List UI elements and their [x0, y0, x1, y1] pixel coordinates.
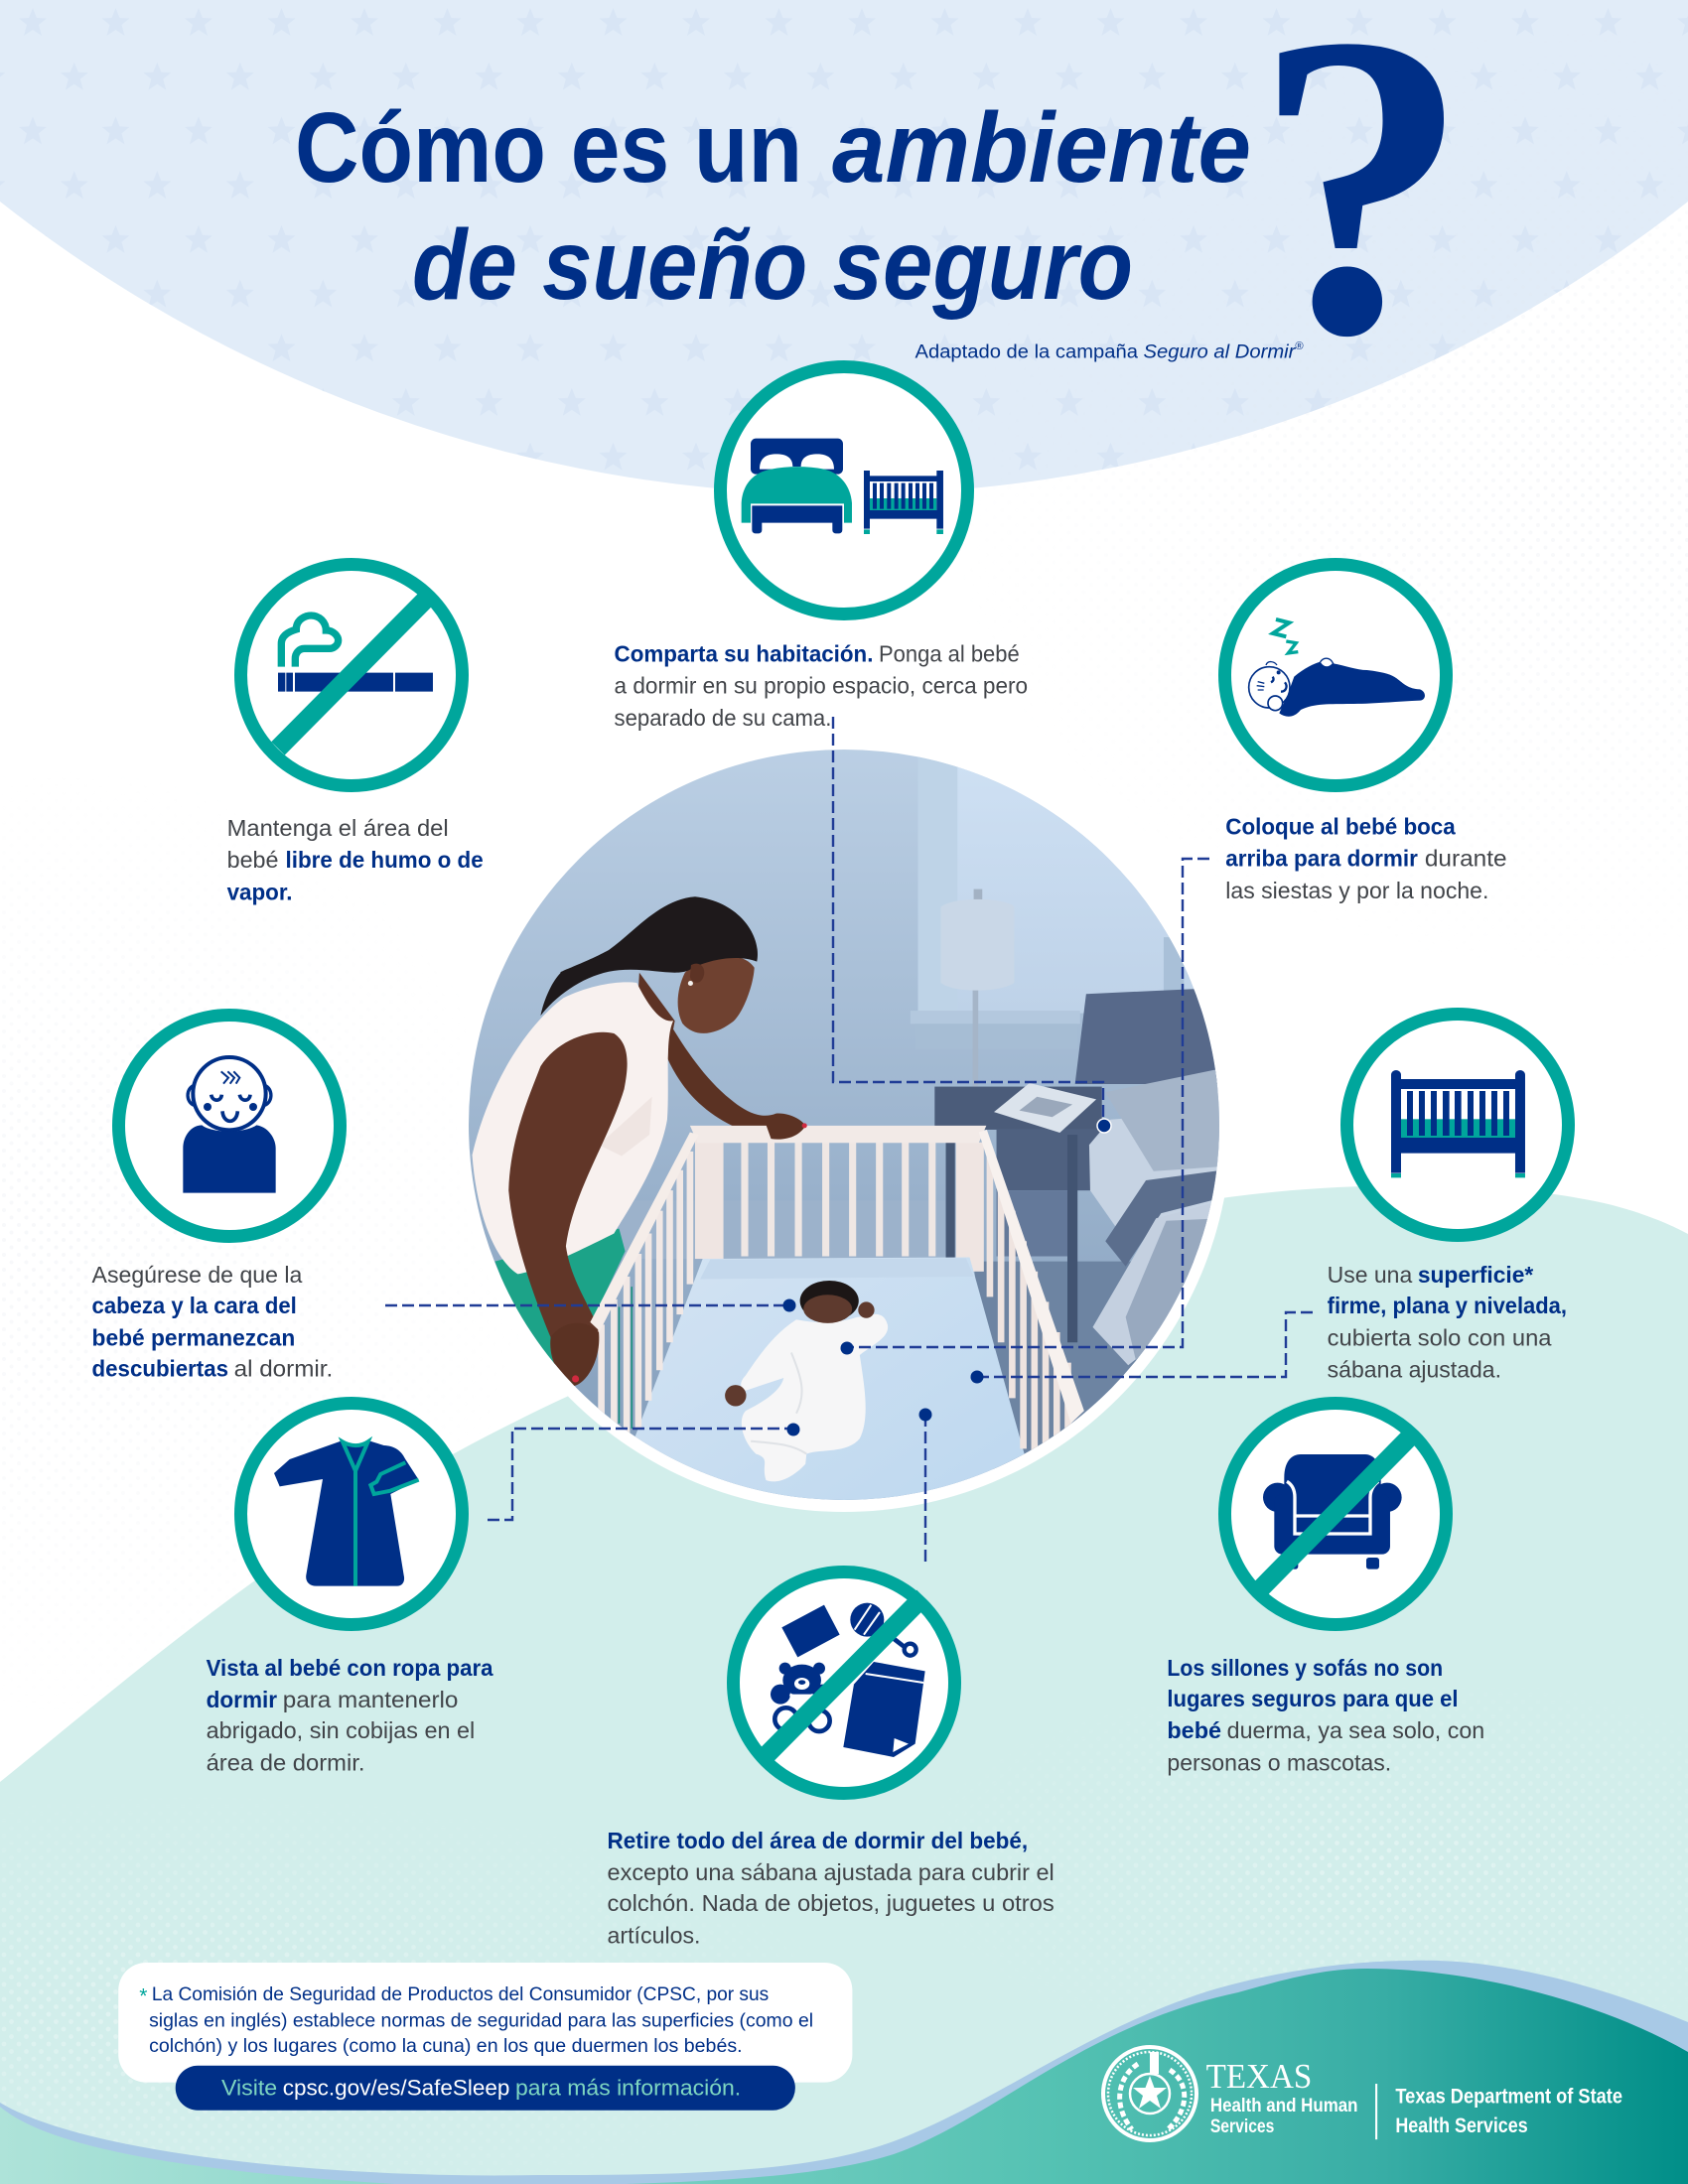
- panel: back to sleep: [1225, 564, 1507, 903]
- text: uncovered head: bebé permanezcan: [92, 1324, 295, 1350]
- baby: [725, 1281, 888, 1481]
- text: firm surface: cubierta solo con una: [1328, 1324, 1552, 1350]
- text: firm surface: sábana ajustada.: [1328, 1357, 1501, 1383]
- icon: no smoking: [240, 564, 463, 786]
- call to action pill: para más información.: [515, 2075, 741, 2100]
- text: uncovered head: cabeza y la cara del: [92, 1293, 297, 1318]
- logo: agency names: TEXAS: [1206, 2057, 1312, 2096]
- text: firm surface: firme, plana y nivelada,: [1328, 1293, 1567, 1318]
- logo: agency names: Health and Human: [1210, 2095, 1358, 2116]
- text: share room: separado de su cama.: [615, 705, 831, 731]
- text: clear items: excepto una sábana ajustada para cubrir el: [608, 1859, 1055, 1885]
- title: [295, 92, 1251, 321]
- panel: clear items: [608, 1572, 1055, 1948]
- crib: [551, 1116, 1084, 1529]
- logo: agency names: Health Services: [1395, 2115, 1528, 2137]
- text: clear items: artículos.: [608, 1922, 701, 1948]
- text: smoke free: Mantenga el área del: [227, 815, 449, 841]
- panel: share room: [615, 367, 1028, 731]
- text: smoke free: libre de humo o de: [286, 847, 484, 873]
- text: sleep clothing: abrigado, sin cobijas en el: [207, 1717, 475, 1743]
- logo: Texas HHS seal: [1103, 2047, 1196, 2140]
- text: smoke free: vapor.: [227, 879, 293, 904]
- icon: no toys or blankets: [733, 1572, 955, 1793]
- text: clear items: colchón. Nada de objetos, juguetes u otros: [608, 1890, 1055, 1916]
- footnote box: *: [139, 1985, 147, 2008]
- attribution: Adaptado de la campaña: [915, 341, 1138, 363]
- window: [911, 756, 1194, 1024]
- footnote box: siglas en inglés) establece normas de seguridad para las superficies (como el: [149, 2011, 813, 2032]
- footnote box: La Comisión de Seguridad de Productos del Consumidor (CPSC, por sus: [152, 1984, 769, 2005]
- attribution: Seguro al Dormir: [1144, 341, 1297, 363]
- call to action pill: [176, 2066, 795, 2111]
- text: no sofas: Los sillones y sofás no son: [1167, 1655, 1443, 1681]
- connector dots: [782, 1119, 1111, 1435]
- text: no sofas: bebé: [1167, 1717, 1221, 1743]
- panel: no sofas: [1167, 1404, 1484, 1775]
- icon: sleep sack: [240, 1404, 463, 1624]
- text: share room: a dormir en su propio espacio, cerca pero: [615, 673, 1028, 699]
- icon: no armchair: [1225, 1404, 1446, 1624]
- text: back to sleep: durante: [1425, 846, 1507, 872]
- footnote box: [118, 1963, 852, 2083]
- panel: firm surface: [1328, 1015, 1569, 1383]
- footnote box: colchón) y los lugares (como la cuna) en los que duermen los bebés.: [149, 2036, 743, 2057]
- text: share room: Ponga al bebé: [879, 640, 1020, 666]
- text: clear items: [608, 1828, 1055, 1948]
- attribution: [915, 341, 1304, 363]
- text: firm surface: superficie*: [1418, 1262, 1534, 1288]
- lamp: [941, 889, 1014, 1086]
- text: back to sleep: Coloque al bebé boca: [1225, 813, 1457, 839]
- nightstand and bed: [934, 989, 1219, 1469]
- logo: agency names: [1206, 2057, 1622, 2139]
- panel: smoke free: [227, 564, 484, 904]
- call to action pill: Visite: [221, 2075, 277, 2100]
- background: mint wave: [0, 1185, 1688, 2184]
- text: no sofas: [1167, 1655, 1484, 1775]
- text: back to sleep: las siestas y por la noche.: [1225, 878, 1488, 903]
- text: back to sleep: arriba para dormir: [1225, 846, 1418, 872]
- text: sleep clothing: para mantenerlo: [283, 1687, 458, 1712]
- logo: agency names: Services: [1210, 2116, 1274, 2137]
- text: firm surface: Use una: [1328, 1262, 1412, 1288]
- text: smoke free: bebé: [227, 847, 279, 873]
- text: no sofas: personas o mascotas.: [1167, 1749, 1391, 1775]
- text: clear items: Retire todo del área de dormir del bebé,: [608, 1828, 1028, 1853]
- title: Cómo es un: [295, 92, 802, 204]
- background: top blue dome: [0, 0, 1688, 496]
- attribution: ®: [1295, 341, 1304, 352]
- text: uncovered head: descubiertas: [92, 1355, 228, 1381]
- text: share room: Comparta su habitación.: [615, 640, 873, 666]
- photo: mother and baby in crib: [447, 735, 1241, 1529]
- panel: sleep clothing: [207, 1404, 494, 1775]
- icon: crib: [1346, 1015, 1569, 1235]
- text: back to sleep: [1225, 813, 1507, 903]
- panel: uncovered head: [92, 1015, 340, 1381]
- text: no sofas: lugares seguros para que el: [1167, 1686, 1459, 1711]
- text: sleep clothing: área de dormir.: [207, 1749, 364, 1775]
- icon: bed and crib: [721, 367, 967, 614]
- title: de sueño seguro: [412, 209, 1133, 321]
- text: sleep clothing: [207, 1655, 494, 1775]
- title: ambiente: [832, 92, 1251, 204]
- icon: baby head: [119, 1015, 340, 1237]
- background: footer wave: [0, 1961, 1688, 2184]
- text: uncovered head: Asegúrese de que la: [92, 1262, 302, 1288]
- logo: agency names: Texas Department of State: [1395, 2086, 1622, 2109]
- icon: baby sleeping on back: [1225, 564, 1446, 786]
- text: firm surface: [1328, 1262, 1567, 1383]
- text: uncovered head: [92, 1262, 333, 1381]
- text: sleep clothing: Vista al bebé con ropa para: [207, 1655, 494, 1681]
- call to action pill: cpsc.gov/es/SafeSleep: [283, 2075, 509, 2100]
- woman: [473, 896, 805, 1386]
- text: sleep clothing: dormir: [207, 1687, 277, 1712]
- text: smoke free: [227, 815, 484, 904]
- dashed connector lines: [385, 717, 1314, 1563]
- text: uncovered head: al dormir.: [234, 1355, 333, 1381]
- text: no sofas: duerma, ya sea solo, con: [1227, 1717, 1484, 1743]
- text: share room: [615, 640, 1028, 731]
